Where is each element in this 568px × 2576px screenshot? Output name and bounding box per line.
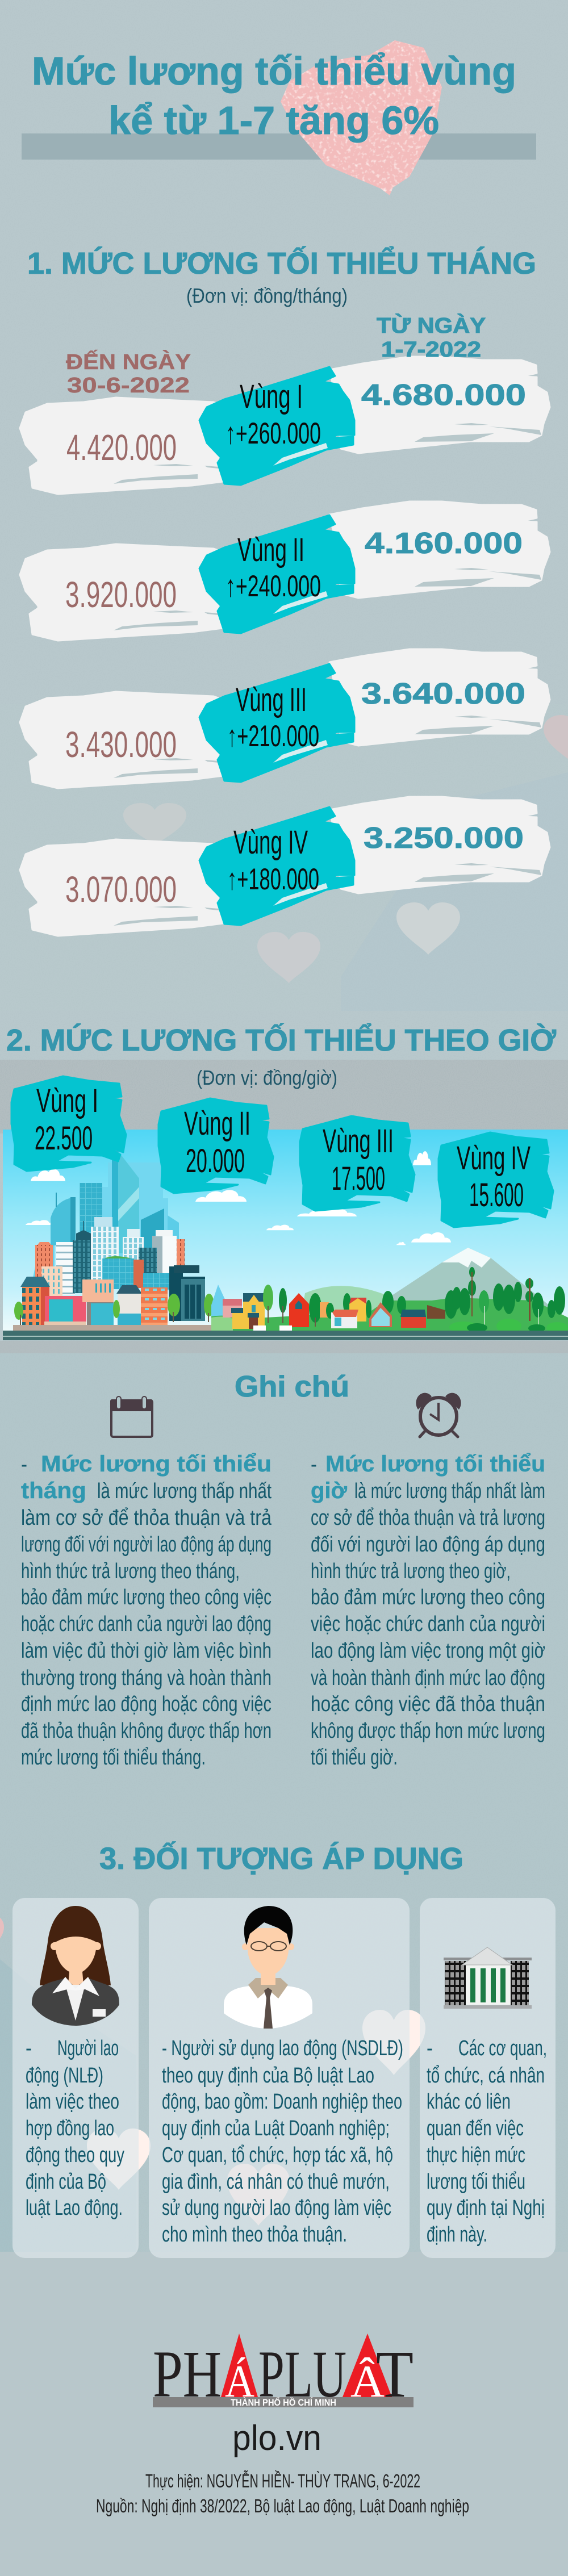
text: organisations: thực hiện mức [427,2143,525,2167]
text block: monthly wage note: định mức lao động hoặc công việc [21,1692,272,1716]
panel: workers [12,1898,139,2258]
decorative hearts under panels [87,2010,425,2226]
village houses [223,1299,242,1306]
callout: region IV: 15.600 [469,1177,524,1214]
text: employers: quy định của Luật Doanh nghiệp; [162,2117,390,2140]
logo: Pháp Luật [153,2334,414,2411]
row: region III: Vùng III [236,681,307,718]
callout: region III [300,1116,415,1211]
text: workers: động (NLĐ) [26,2064,103,2088]
callout: region I: Vùng I [36,1082,98,1119]
heading: section 1: 1. MỨC LƯƠNG TỐI THIỂU THÁNG [27,246,536,281]
text block: monthly wage note: hoặc chức danh của người lao động [21,1612,272,1636]
text: workers: hợp đồng lao [26,2117,114,2140]
text: employers [162,2036,403,2247]
icon: woman [32,1906,119,2026]
mountain and hills [211,1285,233,1318]
text: workers: định của Bộ [26,2170,106,2194]
logo: Pháp Luật: Ậ [350,2357,385,2407]
row: region I: ↑+260.000 [225,417,321,450]
row: region II: Vùng II [237,532,304,568]
text: workers: động theo quy [26,2143,124,2167]
logo: Pháp Luật: T [376,2337,414,2411]
unit note: (Đơn vị: đồng/tháng) [186,284,348,307]
road [3,1331,568,1340]
row: region III [20,649,550,788]
panel: employers [149,1898,410,2258]
section 3: who it applies to [12,1842,556,2258]
row: region I [20,357,550,494]
row: region II: 3.920.000 [65,574,177,615]
credits: Thực hiện: NGUYỄN HIỀN- THÙY TRANG, 6-2022 [145,2470,420,2491]
text block: monthly wage note: làm cơ sở để thỏa thuận và trả [21,1506,272,1530]
decorative heart behind title [281,40,442,195]
text block: monthly wage note: mức lương tối thiểu tháng. [21,1746,206,1770]
column header: until 30-6-2022: ĐẾN NGÀY [66,349,191,374]
logo: Pháp Luật: THÀNH PHỐ HỒ CHÍ MINH [231,2397,336,2408]
row: region I: 4.680.000 [361,379,526,412]
logo: Pháp Luật: PLU [258,2337,346,2411]
text block: hourly wage note: giờ [311,1478,348,1503]
row: region II: 4.160.000 [365,527,523,560]
callout: region II: Vùng II [184,1105,250,1142]
row: region II [20,501,550,641]
text: organisations: - [427,2036,433,2060]
icon: government building [444,1947,532,2009]
text block: hourly wage note [311,1452,545,1770]
text block: monthly wage note: bảo đảm mức lương theo công việc [21,1586,272,1609]
title [32,49,516,143]
text block: hourly wage note: - [311,1453,317,1477]
row: region IV: 3.070.000 [65,869,177,910]
column header: until 30-6-2022: 30-6-2022 [67,374,190,398]
text: organisations: lương tối thiểu [427,2170,525,2194]
callout: region II: 20.000 [186,1143,245,1180]
row: region I: Vùng I [240,378,303,415]
text: workers: Người lao [57,2036,119,2060]
logo: Pháp Luật: Á [225,2357,254,2407]
row: region IV: ↑+180.000 [227,863,319,896]
text: employers: cho mình theo thỏa thuận. [162,2223,347,2247]
column header: from 1-7-2022 [377,313,486,362]
text block: monthly wage note: đã thỏa thuận không được thấp hơn [21,1719,272,1743]
text: employers: Cơ quan, tổ chức, hợp tác xã, hộ [162,2143,393,2167]
text: workers: - [26,2036,32,2060]
callout: region III: 17.500 [332,1160,385,1197]
text: employers: động, bao gồm: Doanh nghiệp theo [162,2090,402,2114]
row: region I: 4.420.000 [66,427,177,468]
callout: region I [11,1076,126,1171]
section: notes [21,1370,545,1770]
heading: section 2: 2. MỨC LƯƠNG TỐI THIỂU THEO GIỜ [6,1023,556,1057]
text block: hourly wage note: tối thiểu giờ. [311,1746,398,1770]
text block: monthly wage note: - [21,1453,27,1477]
section 2: hourly minimum wage [3,1023,568,1340]
row: region IV [20,797,550,936]
text block: monthly wage note: làm việc đủ thời giờ làm việc bình [21,1639,272,1663]
text: workers: làm việc theo [26,2090,119,2114]
callout: region III: Vùng III [323,1123,394,1160]
section 1: monthly minimum wage [20,246,550,936]
icon: calendar [110,1396,153,1437]
column header: until 30-6-2022 [66,349,191,398]
text: employers: - Người sử dụng lao động (NSDLĐ) [162,2036,403,2060]
callout: region II [158,1098,273,1193]
callout: region IV [438,1132,553,1227]
text block: monthly wage note: hình thức trả lương theo tháng, [21,1559,240,1583]
text: employers: theo quy định của Bộ luật Lao [162,2064,374,2088]
title: Mức lương tối thiểu vùng [32,49,516,93]
text block: monthly wage note: thường trong tháng và hoàn thành [21,1666,272,1690]
text: employers: gia đình, cá nhân có thuê mướn, [162,2170,390,2194]
column header: from 1-7-2022: 1-7-2022 [381,338,481,362]
text: organisations: định này. [427,2223,487,2247]
logo: Pháp Luật: PH [153,2337,222,2411]
text: employers: sử dụng người lao động làm việc [162,2196,391,2220]
row: region II: ↑+240.000 [225,570,321,603]
icon: alarm clock [416,1393,461,1437]
mid buildings [35,1245,53,1279]
row: region IV: 3.250.000 [364,822,524,855]
back towers [89,1162,168,1283]
row: region III: 3.430.000 [65,724,177,765]
panel: organisations [420,1898,556,2258]
text: organisations: quan đến việc [427,2117,524,2140]
text block: monthly wage note: Mức lương tối thiểu [41,1452,272,1477]
text: organisations: khác có liên [427,2090,511,2114]
callout: region I: 22.500 [35,1120,93,1157]
text: workers: luật Lao động. [26,2196,123,2220]
text block: monthly wage note: tháng [21,1478,86,1503]
text block: monthly wage note [21,1452,272,1770]
text block: monthly wage note: lương đối với người lao động áp dụng [21,1533,272,1557]
heading: notes: Ghi chú [235,1370,349,1403]
illustration: city and countryside [3,1130,568,1340]
text: workers [26,2036,124,2220]
text: organisations [427,2036,547,2247]
front buildings [169,1266,183,1321]
row: region III: ↑+210.000 [227,720,319,753]
row: region III: 3.640.000 [361,678,525,710]
title: kể từ 1-7 tăng 6% [108,98,439,143]
column header: from 1-7-2022: TỪ NGÀY [377,313,486,338]
unit note: (Đơn vị: đồng/giờ) [197,1066,337,1089]
forest [445,1267,565,1319]
title band [22,133,536,160]
text block: monthly wage note: là mức lương thấp nhất [97,1479,272,1503]
footer [96,2334,469,2516]
website: plo.vn [232,2419,321,2458]
heading: section 3: 3. ĐỐI TƯỢNG ÁP DỤNG [99,1842,463,1876]
text block: hourly wage note: Mức lương tối thiểu [325,1452,545,1477]
row: region IV: Vùng IV [233,824,308,861]
icon: man with glasses [224,1906,312,2029]
